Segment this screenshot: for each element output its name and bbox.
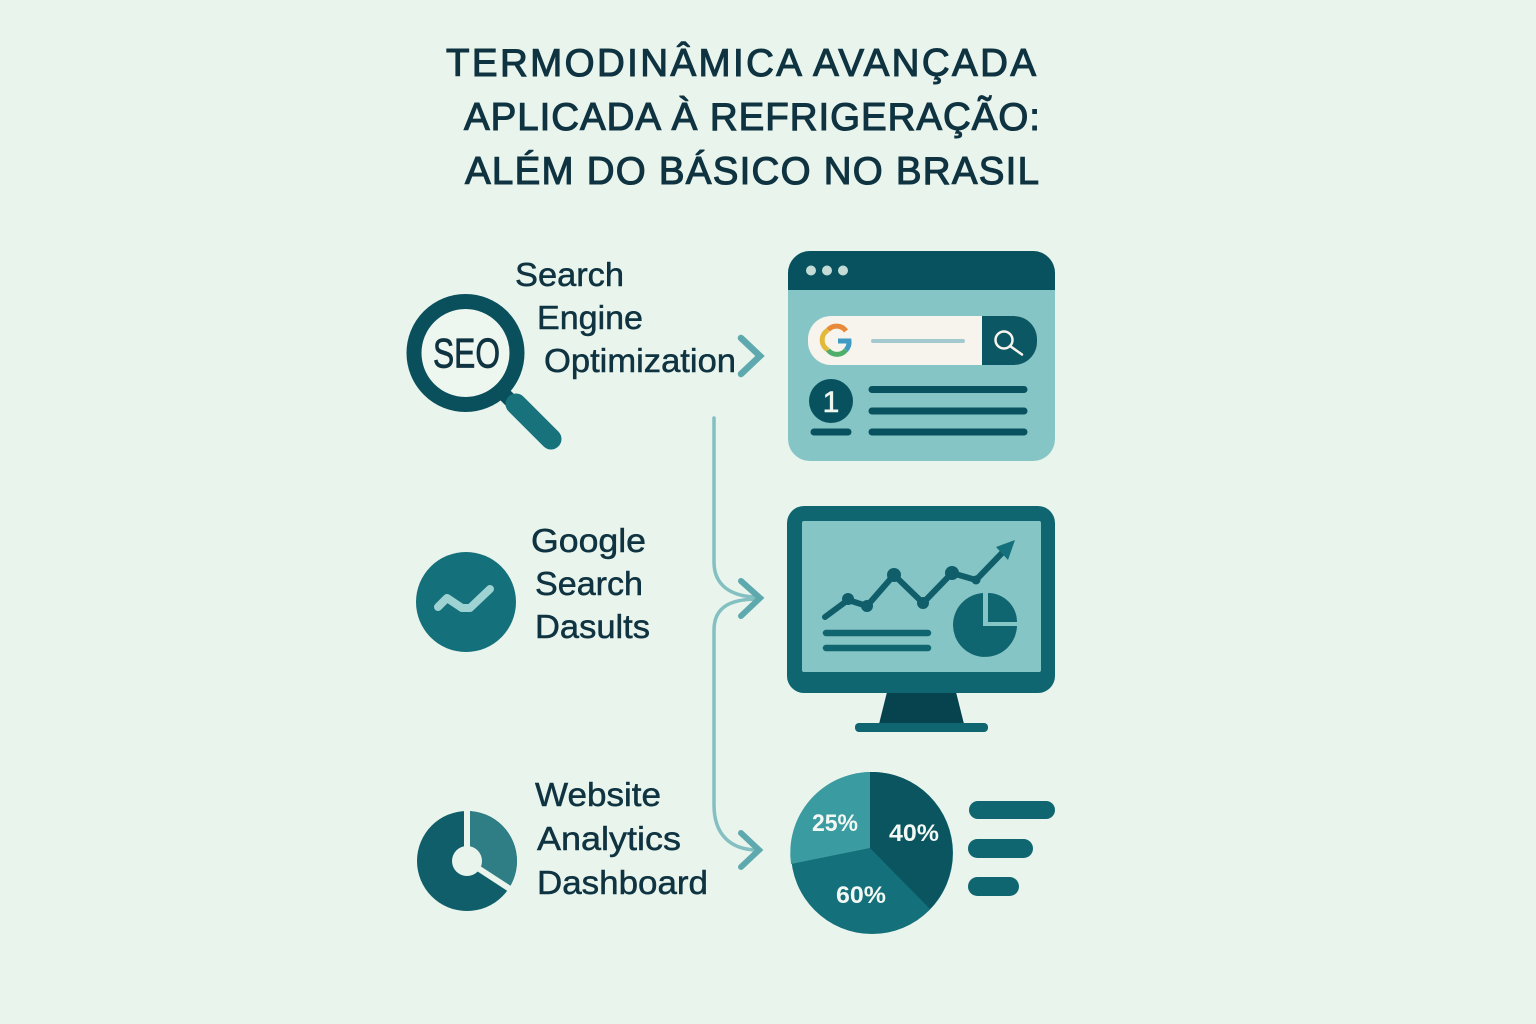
arrow: chevron to search window bbox=[741, 338, 760, 374]
connector arrows bbox=[714, 418, 760, 867]
trend line chart bbox=[825, 540, 1015, 617]
label: Website Analytics Dashboard bbox=[535, 776, 708, 901]
title: TERMODINÂMICA AVANÇADA bbox=[446, 42, 1036, 85]
icon: SEO magnifying glass: SEO bbox=[433, 330, 500, 376]
mini pie bbox=[953, 593, 1017, 657]
label: Website Analytics Dashboard: Website bbox=[535, 776, 661, 813]
label: Google Search Dasults bbox=[531, 522, 650, 645]
title: APLICADA À REFRIGERAÇÃO: bbox=[464, 96, 1040, 139]
pie chart: 60% bbox=[836, 882, 886, 909]
result lines bbox=[872, 390, 1024, 432]
pie chart: 25% bbox=[812, 810, 858, 837]
rank 1 badge bbox=[809, 379, 853, 432]
label: Search Engine Optimization: Search bbox=[515, 256, 624, 293]
title bbox=[446, 42, 1040, 193]
pie chart bbox=[790, 772, 953, 934]
legend bars bbox=[968, 801, 1055, 896]
icon: Google G bbox=[822, 326, 849, 354]
label: Website Analytics Dashboard: Analytics bbox=[537, 820, 681, 857]
icon: analytics donut bbox=[417, 808, 517, 911]
label: Search Engine Optimization: Optimization bbox=[544, 342, 736, 379]
search bar bbox=[808, 316, 1037, 365]
title: ALÉM DO BÁSICO NO BRASIL bbox=[465, 150, 1039, 193]
label: Search Engine Optimization: Engine bbox=[537, 299, 643, 336]
pie chart: 40% bbox=[889, 820, 939, 847]
rank 1 badge: 1 bbox=[823, 386, 839, 419]
label: Website Analytics Dashboard: Dashboard bbox=[537, 864, 708, 901]
label: Google Search Dasults: Search bbox=[535, 565, 643, 602]
label: Google Search Dasults: Google bbox=[531, 522, 646, 559]
text lines bbox=[826, 633, 928, 648]
panel: desktop monitor dashboard bbox=[787, 506, 1055, 732]
icon: SEO magnifying glass bbox=[414, 302, 551, 439]
panel: browser search window bbox=[788, 251, 1055, 461]
icon: Google search results circle bbox=[416, 552, 516, 652]
label: Search Engine Optimization bbox=[515, 256, 736, 379]
label: Google Search Dasults: Dasults bbox=[535, 608, 650, 645]
